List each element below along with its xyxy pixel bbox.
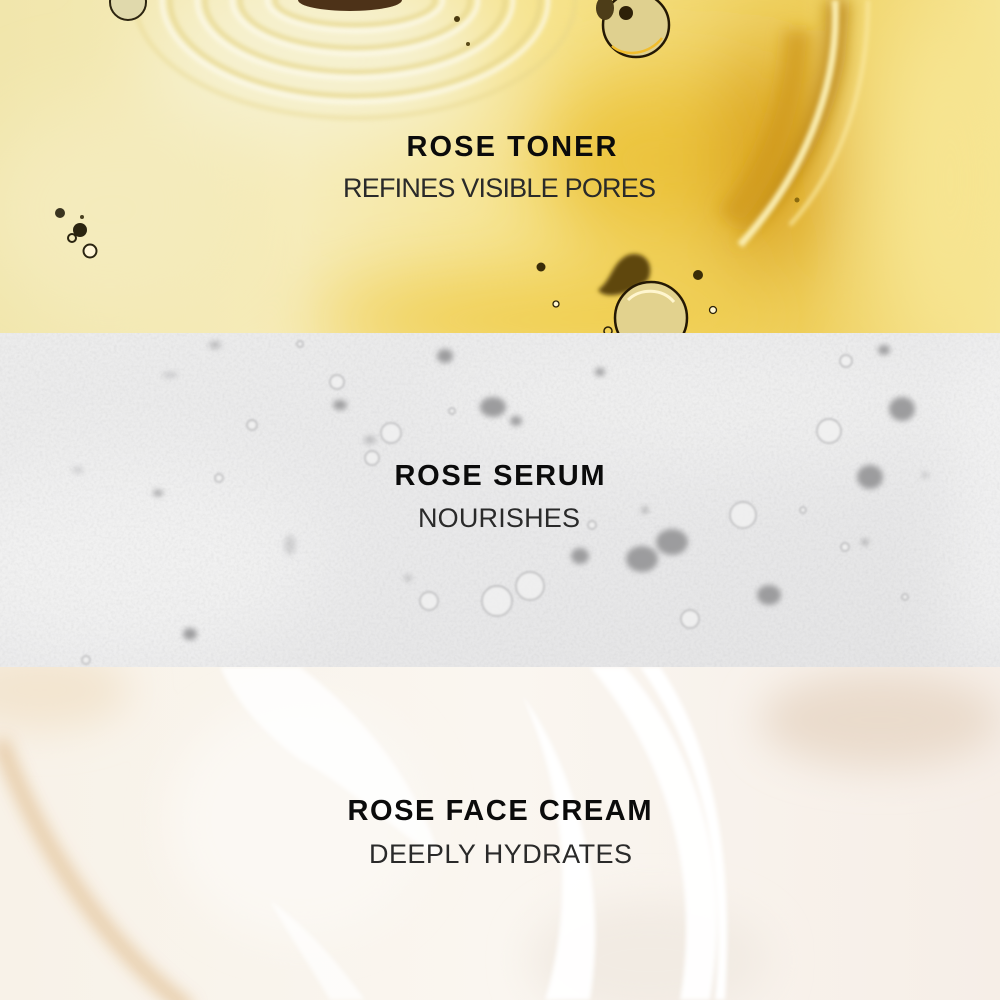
panel: rose serum <box>0 333 1000 667</box>
heading and subtext: rose face cream: ROSE FACE CREAM <box>348 795 652 827</box>
icon: small bubbles <box>55 0 800 335</box>
icon: large bubble bottom <box>596 251 688 333</box>
icon: golden cream edge <box>0 740 190 1000</box>
panel: rose toner <box>0 0 1000 360</box>
icon: clear bubbles <box>82 341 908 664</box>
heading and subtext: rose face cream <box>348 795 652 869</box>
icon: concentric ripples <box>135 0 575 118</box>
heading and subtext: rose toner: ROSE TONER <box>406 131 617 163</box>
heading and subtext: rose serum: NOURISHES <box>418 503 580 533</box>
heading and subtext: rose toner: REFINES VISIBLE PORES <box>343 173 656 203</box>
icon: large bubble top right <box>596 0 669 57</box>
heading and subtext: rose serum: ROSE SERUM <box>394 460 604 492</box>
icon: grey speckles <box>72 341 928 640</box>
panel: rose face cream <box>0 650 1000 1000</box>
icon: glossy cream highlights <box>220 667 727 1000</box>
heading and subtext: rose toner <box>343 131 656 203</box>
heading and subtext: rose face cream: DEEPLY HYDRATES <box>369 839 632 869</box>
heading and subtext: rose serum <box>394 460 604 533</box>
